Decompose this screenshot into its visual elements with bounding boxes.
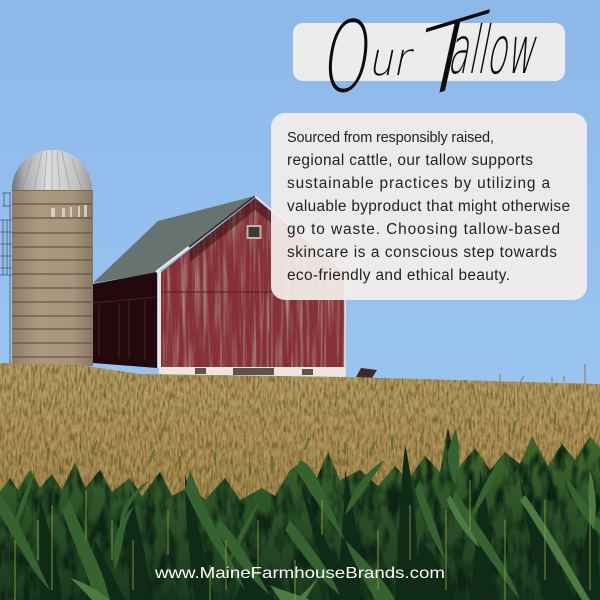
silo pale streaks [51,205,87,217]
stray tassels on horizon [500,364,585,384]
barn [93,192,350,377]
silo body [12,190,93,366]
corn leaves [0,425,600,600]
shadow texture [0,425,600,600]
foundation openings [195,368,313,375]
title panel [293,23,565,81]
barn roof [93,196,255,283]
body text: Sourced from responsibly raised, [287,130,494,146]
body text: skincare is a conscious step towards [287,244,557,261]
title: Our Tallow: O [317,1,379,115]
body text: eco-friendly and ethical beauty. [287,267,510,284]
side wall details [93,297,157,360]
leaf blades dark [39,445,600,600]
green flecks in tassels [20,410,589,475]
body panel [271,113,587,300]
green mass [0,425,600,600]
dome ribs [22,150,82,190]
body text: sustainable practices by utilizing a [287,175,550,192]
tassel field [0,363,600,500]
weathered plank texture [160,192,350,370]
barn window [246,225,262,239]
silo ladder frame [0,193,12,363]
body text: valuable byproduct that might otherwise [287,198,570,215]
body text: regional cattle, our tallow supports [287,152,533,169]
silo bands [12,190,92,357]
barn gable trim [156,247,189,272]
leaf blades light [70,470,596,600]
distant machine on horizon [356,368,377,378]
website footer: www.MaineFarmhouseBrands.com [154,565,445,582]
title: Our Tallow: allow [444,13,545,89]
leaf blades mid [0,426,600,600]
foundation [159,367,345,377]
title: Our Tallow: ur [366,33,417,87]
title: Our Tallow [317,0,545,126]
barn dark side wall [93,272,157,368]
body text [287,130,570,284]
body text: go to waste. Choosing tallow-based [287,221,560,238]
yellow-green stalks [15,480,590,600]
barn red front [159,198,345,368]
silo dome [12,150,92,190]
silo [0,150,93,366]
